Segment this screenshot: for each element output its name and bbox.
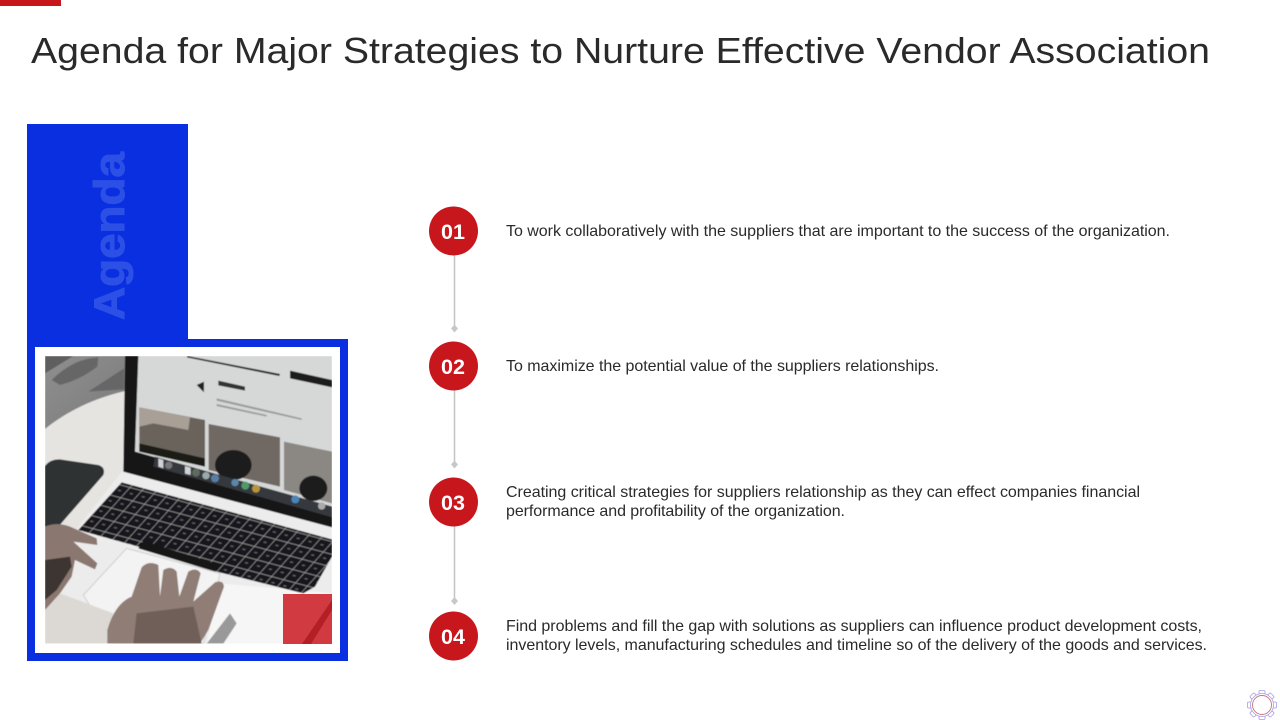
keyboard — [78, 482, 332, 593]
agenda item 03 — [429, 478, 1140, 526]
shadow under hand — [207, 613, 237, 644]
screen thumbnails — [138, 408, 206, 459]
photo frame — [31, 343, 344, 657]
screen dock — [153, 457, 332, 517]
red corner overlay — [283, 594, 332, 644]
connector 2 — [451, 389, 458, 468]
panel: blue agenda tab — [27, 124, 188, 340]
agenda item 04: inventory levels, manufacturing schedules and timeline so of the delivery of the goods and services. — [506, 637, 1207, 654]
trackpad — [83, 548, 220, 644]
screen bezel — [123, 356, 332, 527]
left hand — [45, 524, 97, 610]
right hand — [107, 563, 224, 644]
agenda item 01: 01 — [441, 220, 465, 244]
agenda item 02: To maximize the potential value of the suppliers relationships. — [506, 358, 939, 375]
photo: laptop on a table — [45, 356, 332, 644]
agenda item 01 — [429, 206, 1170, 256]
agenda item 04: Find problems and fill the gap with solutions as suppliers can influence product development costs, — [506, 618, 1202, 635]
connector 1 — [451, 254, 458, 332]
table bottom — [45, 593, 113, 644]
agenda item 04 — [429, 612, 1207, 660]
panel: framed photo — [31, 343, 344, 657]
agenda item 03: Creating critical strategies for suppliers relationship as they can effect companies financial — [506, 484, 1140, 501]
background floor — [45, 356, 127, 429]
agenda item 04: 04 — [441, 625, 465, 649]
top accent bar — [0, 0, 61, 6]
vertical label: Agenda: Agenda — [86, 151, 134, 320]
icon: gear logo — [1248, 690, 1276, 720]
phone — [45, 459, 104, 527]
title: Agenda for Major Strategies to Nurture Effective Vendor Association — [31, 30, 1210, 71]
agenda item 03: performance and profitability of the organization. — [506, 503, 845, 520]
space bar — [138, 541, 220, 572]
connector 3 — [451, 525, 458, 605]
agenda item 01: To work collaboratively with the suppliers that are important to the success of the organization. — [506, 223, 1170, 240]
agenda item 03: 03 — [441, 491, 465, 515]
laptop base — [60, 470, 332, 644]
agenda item 02: 02 — [441, 355, 465, 379]
agenda item 02 — [429, 342, 939, 390]
screen display — [135, 356, 332, 507]
